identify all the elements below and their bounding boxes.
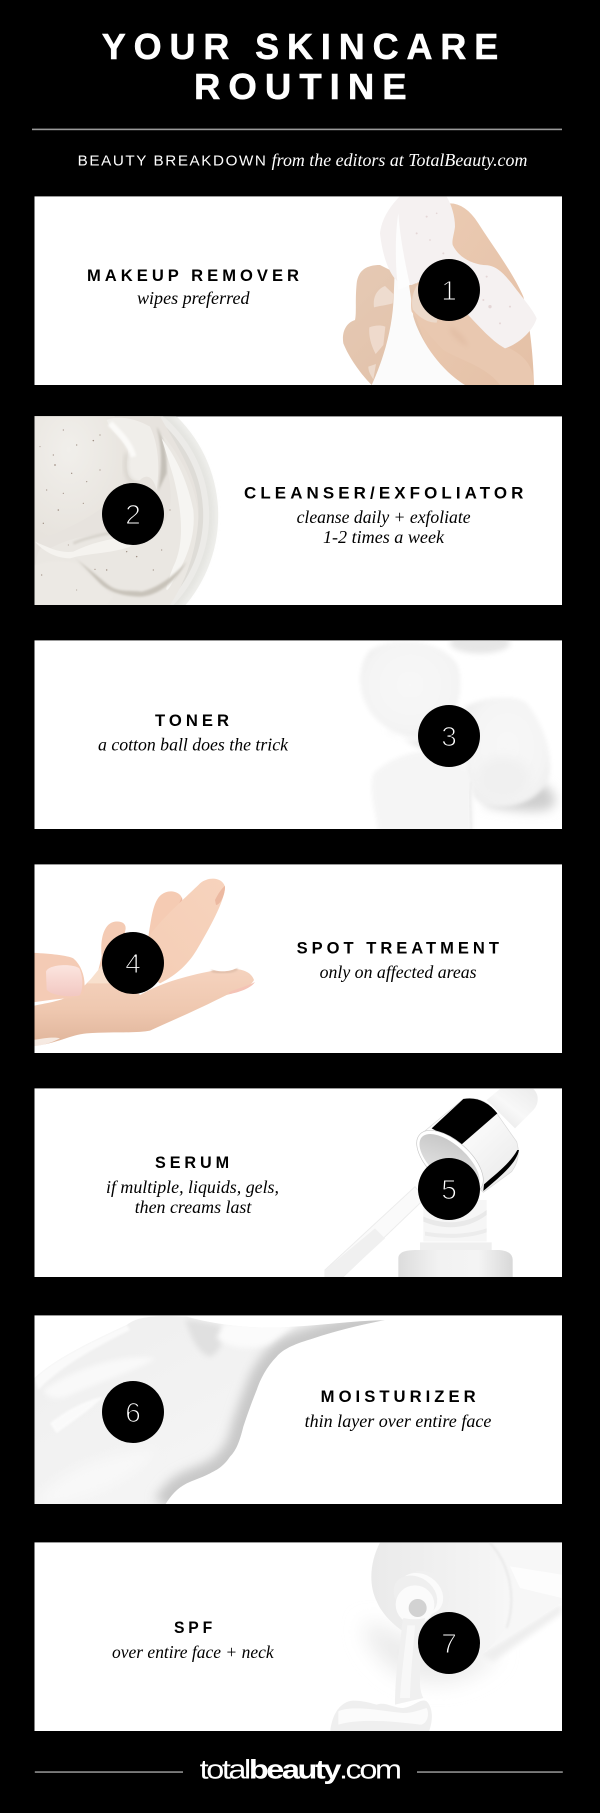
description: if multiple, liquids, gels,: [106, 1177, 279, 1197]
number badge: [102, 932, 164, 994]
panel: SPF: [34, 1542, 562, 1733]
description: thin layer over entire face: [305, 1411, 491, 1431]
subtitle: from the editors at TotalBeauty.com: [272, 150, 527, 170]
number badge: [418, 705, 480, 767]
heading: SERUM: [155, 1154, 233, 1172]
panel: makeup remover: [34, 196, 562, 385]
number badge: 4: [125, 948, 141, 979]
heading: TONER: [155, 712, 233, 730]
number badge: 3: [441, 721, 457, 752]
photo: dropper bottle: [325, 1089, 538, 1280]
description: 1-2 times a week: [323, 527, 445, 547]
description: [106, 1177, 279, 1217]
number badge: [418, 1612, 480, 1674]
title: [102, 26, 506, 107]
photo: hand with dab of cream: [30, 879, 255, 1047]
photo: cotton balls: [360, 633, 555, 832]
number badge: [418, 259, 480, 321]
number badge: [418, 1158, 480, 1220]
number badge: [102, 1381, 164, 1443]
description: a cotton ball does the trick: [98, 735, 289, 755]
panel: serum: [34, 1088, 562, 1280]
heading: MOISTURIZER: [321, 1388, 480, 1406]
panel: toner: [34, 633, 562, 832]
photo: cream swipe: [34, 1316, 384, 1504]
title: ROUTINE: [194, 66, 415, 107]
footer logo: total beauty .com: [200, 1754, 400, 1784]
panel: cleanser/exfoliator: [34, 416, 562, 605]
heading: MAKEUP REMOVER: [87, 267, 303, 285]
number badge: 7: [441, 1628, 457, 1659]
number badge: [102, 483, 164, 545]
number badge: 6: [125, 1397, 141, 1428]
photo: exfoliating cream jar: [34, 416, 218, 605]
subtitle: BEAUTY BREAKDOWN: [78, 154, 268, 170]
heading: CLEANSER/EXFOLIATOR: [244, 485, 528, 503]
panel: moisturizer: [30, 1310, 562, 1510]
photo: tube squeezing out cream: [330, 1543, 562, 1733]
heading: SPOT TREATMENT: [297, 940, 503, 958]
description: only on affected areas: [320, 962, 477, 982]
heading: SPF: [174, 1619, 216, 1637]
description: cleanse daily + exfoliate: [297, 507, 471, 527]
number badge: 1: [441, 275, 457, 306]
description: over entire face + neck: [112, 1642, 275, 1662]
number badge: 5: [441, 1174, 457, 1205]
description: then creams last: [135, 1197, 252, 1217]
panel: spot treatment: [30, 864, 562, 1053]
photo: hand holding wipe: [343, 197, 537, 385]
description: wipes preferred: [137, 288, 250, 308]
number badge: 2: [125, 499, 141, 530]
title: YOUR SKINCARE: [102, 26, 506, 67]
subtitle: [78, 150, 527, 170]
description: [297, 507, 471, 547]
